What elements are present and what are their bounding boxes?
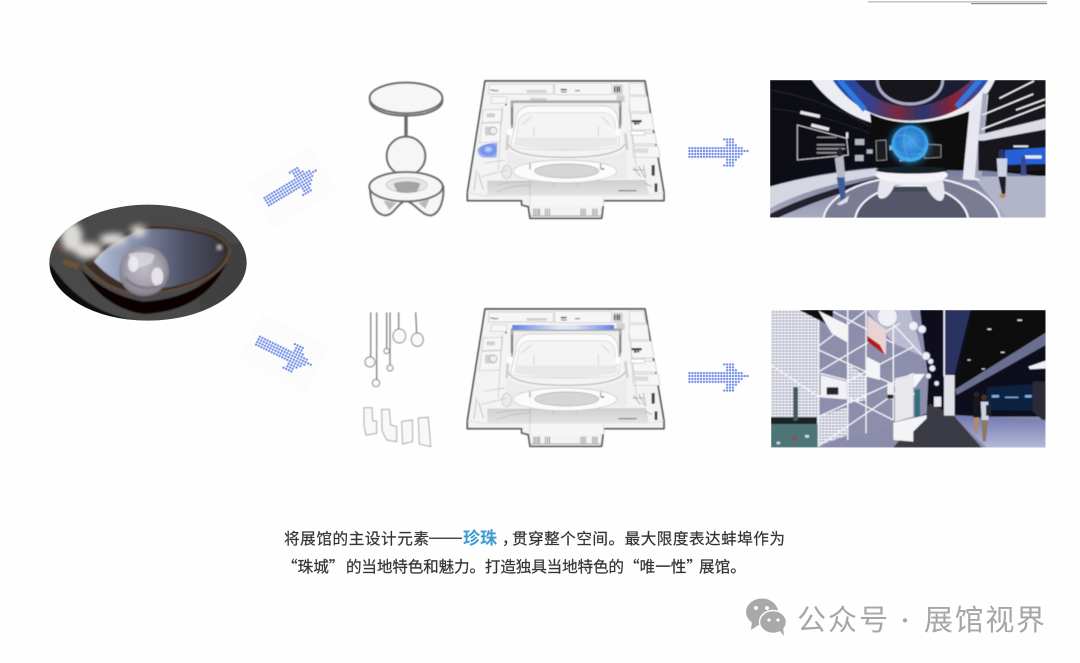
- globe: [889, 123, 931, 165]
- highlight: blue sphere zone: [477, 143, 497, 158]
- highlight: blue band: [512, 325, 614, 330]
- caption line 1: [284, 524, 785, 549]
- icon: wechat: [746, 598, 786, 636]
- right corridor: [920, 310, 1046, 417]
- caption text: [282, 524, 785, 577]
- photo: lattice wall hall: [771, 307, 1046, 448]
- stand: [895, 374, 913, 422]
- caption line 2: [282, 555, 746, 577]
- floor plan: sphere zone highlighted: [467, 81, 664, 218]
- caption line 2: 展馆。: [699, 555, 746, 577]
- display niches: [800, 310, 834, 324]
- arrow: dotted up-right: [246, 146, 338, 229]
- table: [878, 176, 944, 201]
- icon: pendant pearls: [364, 312, 431, 447]
- watermark text: 展馆视界: [924, 597, 1045, 639]
- spheres: [877, 307, 939, 386]
- caption line 2: “珠城”: [282, 555, 344, 577]
- watermark text: ·: [895, 605, 915, 634]
- curved screen: [870, 111, 971, 171]
- photo: globe exhibition hall: [770, 80, 1046, 218]
- photo: pearl in shell: [47, 203, 250, 327]
- caption line 1: 将展馆的主设计元素: [284, 527, 429, 549]
- arrow: dotted down-right: [238, 313, 329, 393]
- floor plan: ceiling band highlighted: [467, 309, 664, 446]
- arrow: dotted right bottom: [688, 363, 749, 392]
- caption line 2: “唯一性”: [624, 555, 702, 577]
- lattice wall: [919, 311, 930, 416]
- people: [835, 148, 1027, 205]
- watermark text: [797, 597, 1045, 639]
- top rules: [868, 1, 1047, 4]
- caption line 1: 珍珠: [463, 524, 497, 549]
- caption line 1: ，: [502, 527, 518, 549]
- arrow: dotted right top: [688, 138, 749, 167]
- right section: [982, 81, 1045, 138]
- wall graphics: [800, 111, 848, 138]
- caption line 1: 贯穿整个空间。最大限度表达蚌埠作为: [512, 527, 785, 549]
- ceiling: [812, 80, 995, 129]
- machine: [771, 424, 818, 447]
- watermark: [746, 597, 1045, 639]
- caption line 2: 的当地特色和魅力。打造独具当地特色的: [346, 555, 624, 577]
- icon: pearl totem model: [369, 83, 443, 215]
- watermark text: 公众号: [797, 597, 888, 639]
- people: [973, 392, 991, 442]
